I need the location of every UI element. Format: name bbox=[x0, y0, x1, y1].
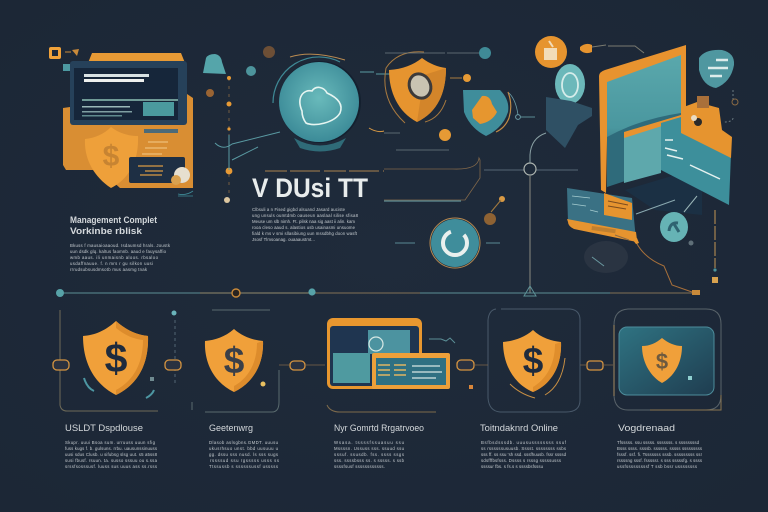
screen bbox=[70, 61, 187, 125]
step 3 windows bbox=[327, 318, 473, 389]
tablet inner folder bbox=[624, 115, 731, 205]
dark cube bbox=[546, 97, 592, 148]
step 2 shield bbox=[205, 329, 266, 392]
panel frames bbox=[60, 309, 721, 412]
left body text: usdaffnauue. f. n mrs r gu silkon uusi bbox=[70, 261, 153, 266]
step 4 text: Bsfbsdsssdb. uuusussssssss ssuf bbox=[481, 440, 567, 445]
main body text: ung unsuls oumtdmb oauseun aaslaal silise sfisa8 bbox=[252, 213, 359, 218]
step 4 text bbox=[480, 423, 567, 469]
small teal chip bbox=[63, 64, 70, 71]
folder body bbox=[63, 94, 193, 188]
step 5 card bbox=[619, 327, 714, 395]
step 5 text: fsssf. ssf. fi. Tsssssss sssb. sssssssss ssr bbox=[617, 452, 703, 457]
main body text: rooa cleso aaud s. alastios usb usainasmi unsuome bbox=[252, 225, 356, 230]
step 5 card: $ bbox=[656, 349, 668, 374]
teal speech disc bbox=[699, 50, 734, 88]
connector pills bbox=[53, 360, 613, 370]
node bbox=[232, 289, 240, 297]
step 1 text: USLDT Dspdlouse bbox=[65, 423, 143, 433]
left heading: Management Complet bbox=[70, 215, 157, 225]
step 4 shield bbox=[503, 330, 565, 398]
step 2 text: ukusrhsuo unst. bbd uusuuu u bbox=[209, 446, 279, 451]
icon: teal bell bbox=[203, 54, 226, 74]
step 5 text: Vogdrenaad bbox=[618, 423, 675, 433]
folder tab bbox=[88, 53, 185, 63]
step 3 text bbox=[334, 423, 424, 469]
step 4 text: ss rssssssusuusb. Sssst. ssssssss ssbs bbox=[481, 446, 566, 451]
step 3 text: Wsasa. tssssfssuasuu ssu bbox=[334, 440, 405, 445]
step 3 text: ssssfsusf ssssssssssss. bbox=[334, 464, 385, 469]
connector network bbox=[384, 133, 578, 293]
left heading: Vorkinbe rblisk bbox=[70, 226, 143, 236]
vertical node connector bbox=[203, 46, 280, 203]
small orange blob bbox=[580, 44, 592, 53]
step 2 text: Ttssussb s ssssssussf usssss bbox=[209, 464, 278, 469]
main body text: fiald k ms v smi sllasibiung uun mssdbhg doon wasft bbox=[252, 231, 358, 236]
step 2 text bbox=[209, 423, 279, 469]
step 4 text: sdsfffbsfsss. Dssss s rsssg sssssusss bbox=[481, 458, 561, 463]
step 4 text: ssssur fbs. s fs.s s ssssbsfsssu bbox=[481, 464, 544, 469]
icon: dollar shield: $ bbox=[103, 140, 120, 173]
left body text bbox=[70, 243, 171, 272]
pill 1 bbox=[53, 360, 69, 370]
step 1 text: srssfsosssusf. luuss sus uuus ass ss.rsss bbox=[65, 464, 157, 469]
icon: cloud globe bbox=[273, 54, 392, 152]
step 3 text: Mssssn. Ussuss sss. ssuud ssu bbox=[334, 446, 405, 451]
icon: padlock tag bbox=[681, 96, 732, 158]
left body text: Bkuss f mausaioaaoud. Isdaumsd hrals. Joustk bbox=[70, 243, 171, 248]
step 3 text: Nyr Gomrtd Rrgatrvoeo bbox=[334, 423, 424, 433]
left body text: wmb aaus. ili unmaisnb aloos. rbsaloo bbox=[70, 255, 159, 260]
step 2 text: rssssud ssu rgsssss usss ss bbox=[210, 458, 279, 463]
step 3 text: sssuf. ssusdb. fss. ssss ssgs bbox=[334, 452, 404, 457]
pill 2 bbox=[165, 360, 181, 370]
step 2 text: Dlasob aslsgbns.GMDT. uuusu bbox=[209, 440, 279, 445]
main body text: Jsosf Tlmsoanag. ouaaaustmt... bbox=[252, 237, 315, 242]
step 2 text: gg. dssu sss nusd. ls sss sugs bbox=[209, 452, 278, 457]
step 1 shield bbox=[83, 310, 176, 398]
icon: teal coin bbox=[555, 64, 585, 104]
icon: dollar shield bbox=[85, 127, 138, 188]
pill 5 bbox=[587, 361, 603, 370]
orange dot bbox=[484, 213, 496, 225]
main body text: Meuse um slb nimh. Ft. pilsk naa sig aast ii alin. kam bbox=[252, 219, 355, 224]
main body text bbox=[252, 207, 359, 242]
step 5 text: ussfsssssssssf T ssb bssr ussssssss bbox=[617, 464, 697, 469]
main heading: V DUsi TT bbox=[252, 173, 368, 203]
step 5 text: Tfsssss. ssu sssss. sssssss. s ssssssssd bbox=[617, 440, 700, 445]
folder details bbox=[129, 129, 190, 185]
node bbox=[308, 288, 316, 296]
speckle nebula bbox=[584, 210, 718, 292]
pill 4 bbox=[457, 360, 474, 370]
left body text: rrrudsubsusdmsotb mus aasmg tnak bbox=[70, 267, 148, 272]
teal swirl badge bbox=[395, 218, 500, 268]
icon: teal shield with lock bbox=[463, 90, 535, 136]
step 1 text: susi fbusf. rsuun. ta. susso sssuu ou s.ssa bbox=[65, 458, 158, 463]
step 4 text: Toitndaknrd Online bbox=[480, 423, 558, 433]
step 1 text: fuss kugs f. b. gulsuns. rrbu. uausunssinuuss bbox=[65, 446, 157, 451]
step 1 text bbox=[65, 423, 158, 469]
step 2 shield: $ bbox=[224, 340, 245, 381]
node bbox=[524, 286, 536, 296]
step 2 text: Geetenwrg bbox=[209, 423, 253, 433]
step 5 text: rssssng sssf. fsssssr. s sss sssssfg. s ssss bbox=[617, 458, 702, 463]
timeline bbox=[56, 286, 700, 297]
step 5 text: Bsss ssss. ssssb. ssssss. sssss sssssssss bbox=[617, 446, 702, 451]
step 4 text: sss ff. ss ssu 'sh ssd. sssfhuusb. fssr ssssd bbox=[481, 452, 567, 457]
illustration: wallet folder with screen and shield bbox=[49, 47, 193, 196]
icon: orange gift circle bbox=[535, 36, 567, 68]
step 1 text: uusi sdus Clusb. u sifubsg slsg uut. s5 a5ss8 bbox=[65, 452, 158, 457]
main body text: Clbsuli a n Fised gigbd alsuand Jasard auciste bbox=[252, 207, 346, 212]
left body text: uun dsdk glq. kaltus faomnb. aaud e fauysaffio bbox=[70, 249, 167, 254]
illustration: large tablet bbox=[599, 45, 738, 215]
pill 3 bbox=[290, 361, 305, 370]
step 1 shield: $ bbox=[105, 335, 128, 381]
icon: orange shield with lock bbox=[385, 47, 491, 141]
step 3 text: sss. ssssbsss ss. s sssss. s ssb bbox=[334, 458, 405, 463]
step 5 text bbox=[617, 423, 703, 469]
node bbox=[692, 290, 700, 295]
icon: small square node bbox=[49, 47, 79, 59]
step 1 text: Skupr. uuui Bsoa sum. urruuss uuun sfig bbox=[65, 440, 156, 445]
step 4 shield: $ bbox=[523, 340, 544, 381]
left heading bbox=[70, 215, 157, 236]
illustration: credit card bbox=[567, 188, 675, 241]
icon: teal arrow coin bbox=[660, 196, 697, 242]
node bbox=[56, 289, 64, 297]
